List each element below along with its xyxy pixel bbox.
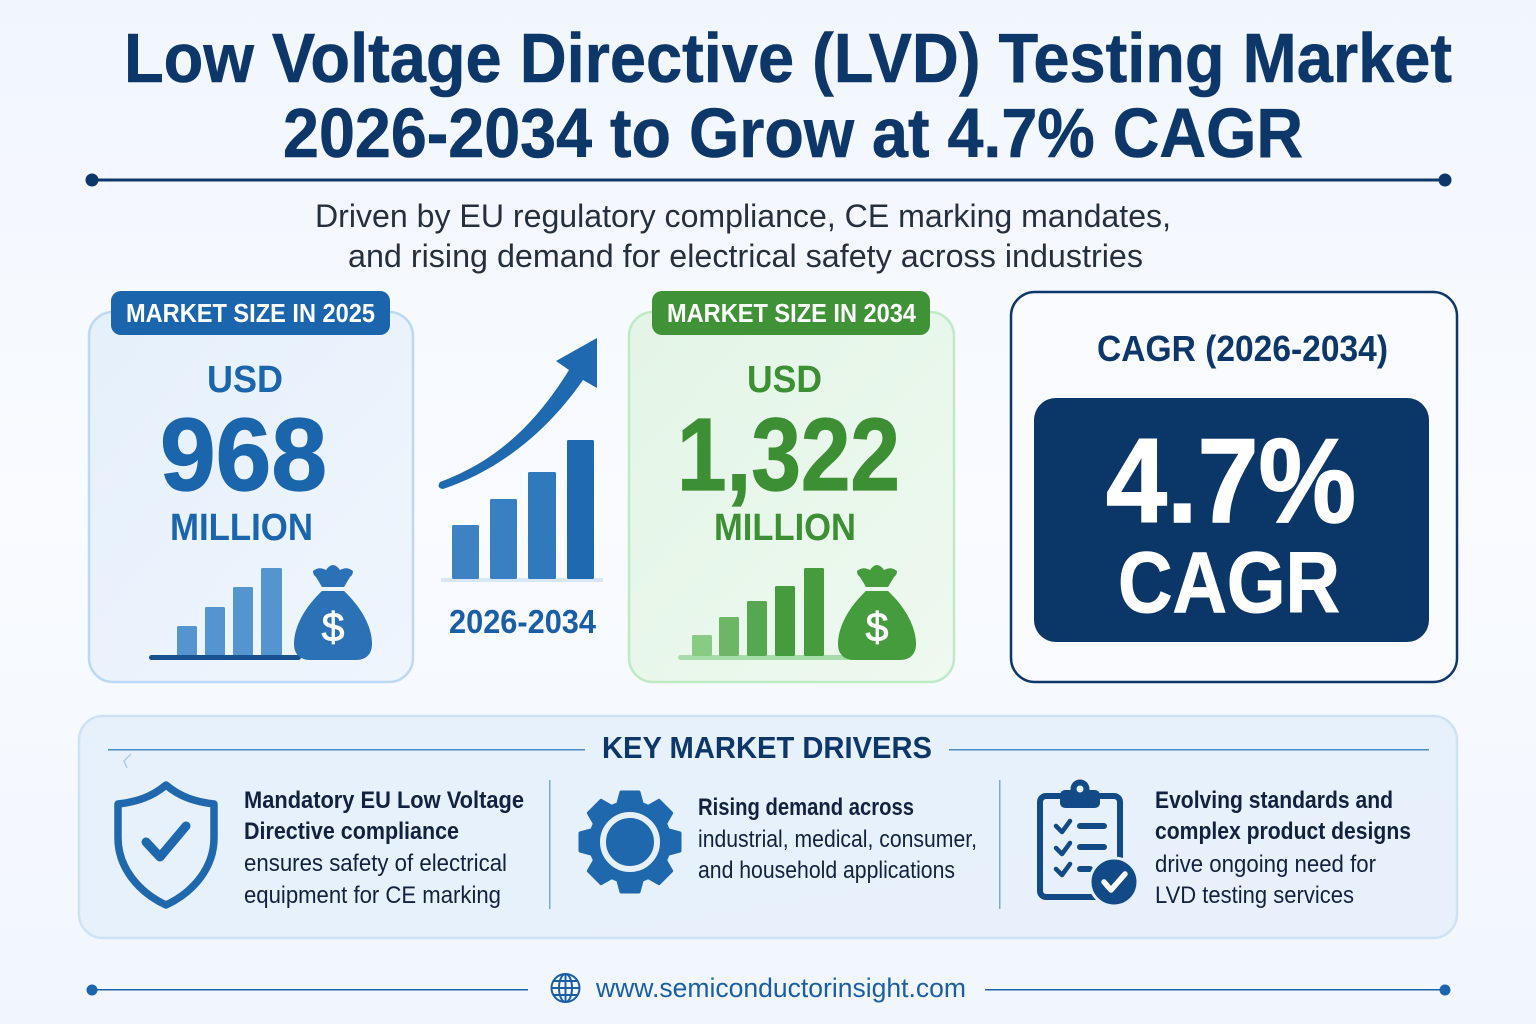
CAGR value box: 4.7% <box>1106 414 1356 548</box>
value: USD 1,322 million: MILLION <box>714 507 856 549</box>
website url: www.semiconductorinsight.com <box>595 973 966 1003</box>
driver 2 text: Rising demand across <box>698 794 914 821</box>
driver 3 text: LVD testing services <box>1155 882 1354 909</box>
badge: market size in 2025 <box>111 291 390 335</box>
icon: clipboard checklist <box>1040 780 1138 906</box>
arrow <box>439 338 597 489</box>
driver 3 text: Evolving standards and <box>1155 787 1393 814</box>
value: USD 968 million <box>160 359 327 549</box>
panel: market size 2025 <box>89 291 413 682</box>
panel: key market drivers <box>79 716 1457 938</box>
driver 2 text: industrial, medical, consumer, <box>698 826 977 853</box>
icon: money bag <box>294 565 372 660</box>
icon: gear <box>580 792 680 892</box>
subtitle: and rising demand for electrical safety across industries <box>348 238 1143 274</box>
title <box>124 19 1452 172</box>
footer <box>86 973 1450 1003</box>
subtitle <box>315 198 1171 274</box>
driver 1 text: equipment for CE marking <box>244 882 501 909</box>
CAGR value box: CAGR <box>1118 535 1340 631</box>
icon: bar chart <box>149 568 301 660</box>
growth chart <box>439 338 603 640</box>
driver 2 text <box>698 794 977 884</box>
panel: market size 2034 <box>629 291 954 682</box>
icon: globe <box>552 974 580 1002</box>
driver 1 text: Mandatory EU Low Voltage <box>244 787 524 814</box>
driver 2 <box>580 792 977 892</box>
badge: market size in 2034: MARKET SIZE IN 2034 <box>667 300 917 328</box>
title divider <box>86 174 1452 186</box>
driver 1 text: ensures safety of electrical <box>244 850 507 877</box>
driver 3 <box>1040 780 1411 909</box>
drivers heading: KEY MARKET DRIVERS <box>602 730 932 765</box>
icon: money bag: $ <box>322 604 345 650</box>
driver 3 text: drive ongoing need for <box>1155 851 1376 878</box>
driver 1 text: Directive compliance <box>244 818 459 845</box>
subtitle: Driven by EU regulatory compliance, CE marking mandates, <box>315 198 1171 234</box>
driver 2 text: and household applications <box>698 857 955 884</box>
title: Low Voltage Directive (LVD) Testing Market <box>124 19 1452 97</box>
icon: shield check <box>118 785 214 905</box>
icon: money bag: $ <box>866 604 889 650</box>
value: USD 968 million: MILLION <box>170 507 313 549</box>
badge: market size in 2034 <box>652 291 930 335</box>
driver 3 text <box>1155 787 1411 909</box>
driver 1 text <box>244 787 524 909</box>
value: USD 1,322 million: 1,322 <box>677 397 900 512</box>
period label: 2026-2034 <box>449 603 597 640</box>
badge: market size in 2025: MARKET SIZE IN 2025 <box>126 300 375 328</box>
CAGR value box <box>1034 398 1429 642</box>
value: USD 1,322 million: USD <box>747 359 822 401</box>
bars <box>441 440 603 582</box>
value: USD 968 million: 968 <box>160 397 327 512</box>
value: USD 968 million: USD <box>207 359 283 401</box>
CAGR heading: CAGR (2026-2034) <box>1097 328 1388 369</box>
icon: bar chart <box>678 568 858 660</box>
value: USD 1,322 million <box>677 359 900 549</box>
icon: money bag <box>838 565 916 660</box>
driver 1 <box>118 785 524 909</box>
panel: CAGR <box>1011 292 1457 682</box>
title: 2026-2034 to Grow at 4.7% CAGR <box>283 94 1303 172</box>
driver 3 text: complex product designs <box>1155 818 1411 845</box>
